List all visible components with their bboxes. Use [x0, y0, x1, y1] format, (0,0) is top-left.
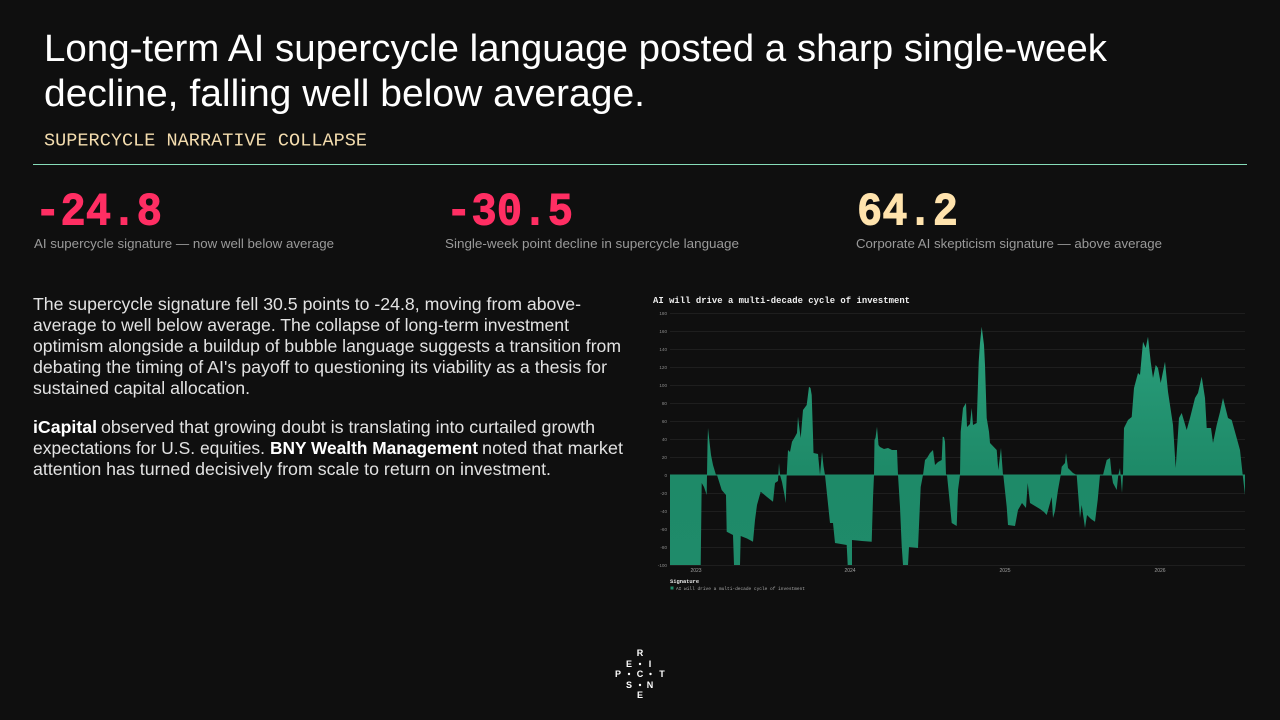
text block: supercycle analysis: [33, 294, 621, 398]
text block: firm observations: expectations for U.S. equities.: [33, 438, 265, 458]
logo: S: [626, 680, 632, 690]
x axis labels: 2023: [690, 568, 702, 574]
chart title: AI will drive a multi-decade cycle of investment: [653, 296, 910, 306]
logo: R: [637, 648, 644, 658]
text block: supercycle analysis: sustained capital allocation.: [33, 378, 250, 398]
y axis labels: 120: [659, 365, 667, 370]
stat: single-week decline: -30.5: [446, 186, 573, 238]
text block: firm observations: [33, 417, 623, 479]
chart: multi-decade investment signature: [653, 296, 1245, 592]
title: decline, falling well below average.: [44, 73, 645, 115]
y axis labels: 180: [659, 311, 667, 316]
stat: supercycle signature: AI supercycle signature — now well below average: [34, 236, 334, 251]
x axis labels: 2026: [1154, 568, 1166, 574]
text block: supercycle analysis: optimism alongside a buildup of bubble language suggests a transition from: [33, 336, 621, 356]
x axis labels: [690, 568, 1166, 574]
logo: [615, 648, 665, 700]
stat: corporate skepticism: 64.2: [857, 186, 958, 238]
y axis labels: -80: [660, 545, 667, 550]
text block: supercycle analysis: debating the timing of AI's payoff to questioning its viability as a thesis for: [33, 357, 607, 377]
logo: I: [649, 659, 651, 669]
y axis labels: 60: [662, 419, 667, 424]
logo: E: [637, 690, 643, 700]
text block: firm observations: observed that growing doubt is translating into curtailed growth: [101, 417, 595, 437]
y axis labels: 40: [662, 437, 667, 442]
x axis labels: 2024: [844, 568, 856, 574]
y axis labels: -20: [660, 491, 667, 496]
logo: T: [659, 669, 665, 679]
y axis labels: 20: [662, 455, 667, 460]
x axis labels: 2025: [999, 568, 1011, 574]
stat: corporate skepticism: [856, 186, 1162, 251]
stat: supercycle signature: -24.8: [35, 186, 162, 238]
logo: P: [615, 669, 621, 679]
y axis labels: 100: [659, 383, 667, 388]
legend: [670, 579, 805, 592]
logo: N: [647, 680, 653, 690]
y axis labels: 160: [659, 329, 667, 334]
title: Long-term AI supercycle language posted a sharp single-week: [44, 28, 1108, 70]
area series: [670, 327, 1245, 565]
y axis labels: 0: [664, 473, 667, 478]
text block: supercycle analysis: average to well below average. The collapse of long-term investment: [33, 315, 569, 335]
text block: firm observations: attention has turned decisively from scale to return on investment.: [33, 459, 551, 479]
subtitle: SUPERCYCLE NARRATIVE COLLAPSE: [44, 130, 367, 152]
text block: firm observations: iCapital: [33, 417, 97, 437]
title: [44, 28, 1108, 115]
text block: supercycle analysis: The supercycle signature fell 30.5 points to -24.8, moving from above-: [33, 294, 581, 314]
y axis labels: -100: [658, 563, 667, 568]
legend: Signature: [670, 579, 699, 585]
stat: supercycle signature: [34, 186, 334, 251]
legend: AI will drive a multi-decade cycle of investment: [676, 586, 805, 592]
text block: firm observations: noted that market: [482, 438, 623, 458]
zero line: [670, 474, 1245, 476]
stat: single-week decline: Single-week point decline in supercycle language: [445, 236, 739, 251]
stat: single-week decline: [445, 186, 739, 251]
y axis labels: [658, 311, 667, 568]
y axis labels: 140: [659, 347, 667, 352]
y axis labels: -60: [660, 527, 667, 532]
text block: firm observations: BNY Wealth Management: [270, 438, 478, 458]
logo: E: [626, 659, 632, 669]
logo: C: [637, 669, 644, 679]
y axis labels: -40: [660, 509, 667, 514]
stat: corporate skepticism: Corporate AI skepticism signature — above average: [856, 236, 1162, 251]
y axis labels: 80: [662, 401, 667, 406]
